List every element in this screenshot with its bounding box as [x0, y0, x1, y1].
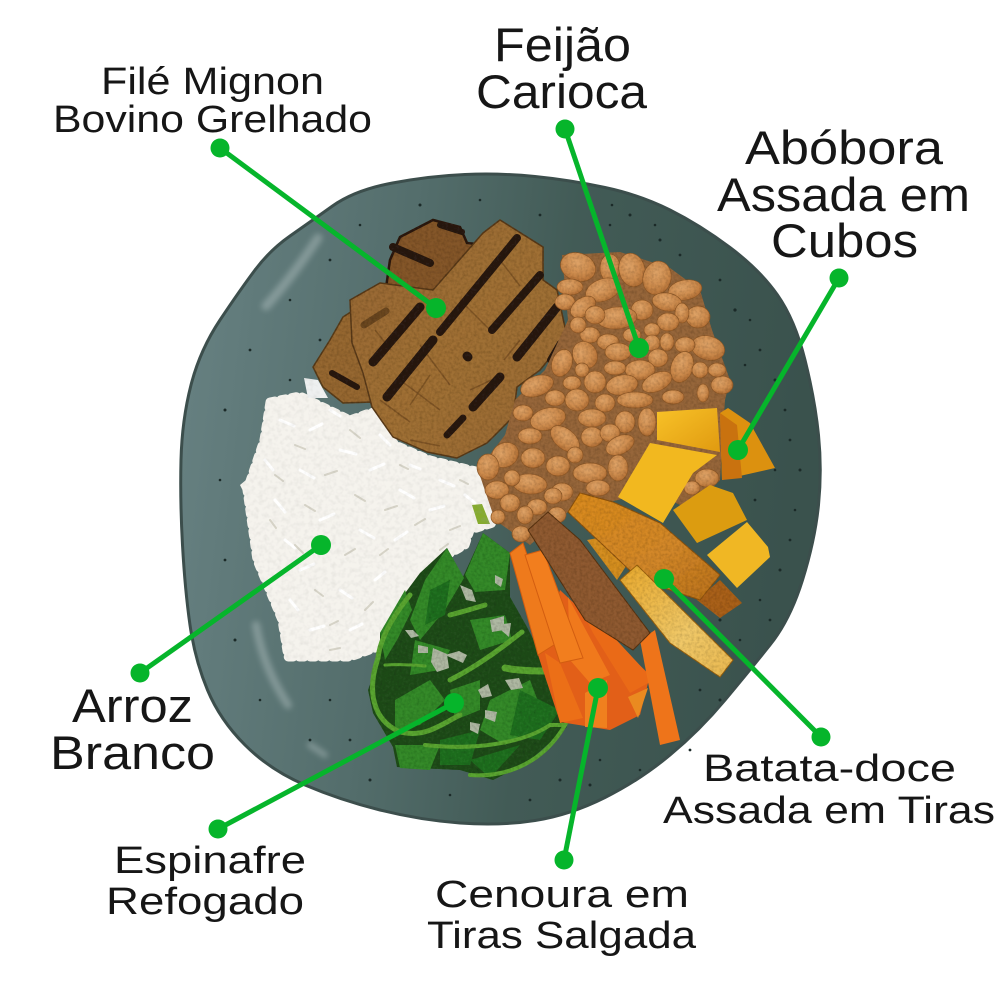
label: Espinafre Refogado: Refogado [106, 881, 304, 923]
label: Espinafre Refogado: Espinafre [114, 840, 306, 882]
label: Filé Mignon Bovino Grelhado: Filé Mignon [101, 61, 324, 103]
strip pale [620, 565, 733, 677]
label: Arroz Branco: Branco [50, 726, 215, 779]
strip brown [528, 512, 650, 650]
label: Abóbora Assada em Cubos: Cubos [771, 214, 918, 267]
label: Espinafre Refogado [106, 840, 306, 923]
plate speckles [219, 199, 801, 801]
leader: Feijão [556, 120, 649, 358]
label: Abóbora Assada em Cubos [717, 121, 970, 267]
label: Filé Mignon Bovino Grelhado: Bovino Grelhado [53, 99, 372, 141]
label: Abóbora Assada em Cubos: Abóbora [745, 121, 944, 174]
food: pumpkin cubes [618, 408, 775, 588]
plate glare [256, 238, 325, 755]
leader: Arroz [130, 535, 331, 682]
label: Batata-doce Assada em Tiras [663, 748, 995, 832]
label: Batata-doce Assada em Tiras: Assada em Tiras [663, 790, 995, 832]
steak main [350, 220, 567, 458]
label: Arroz Branco [50, 679, 215, 779]
food: sweet potato [528, 493, 742, 677]
label: Feijão Carioca: Feijão [494, 18, 631, 71]
food: beans [477, 248, 733, 545]
food: grilled steak [313, 220, 567, 458]
label: Feijão Carioca [476, 18, 648, 118]
plate [181, 174, 820, 824]
label: Cenoura em Tiras Salgada [427, 874, 697, 957]
food: spinach [368, 533, 567, 780]
green leek bit [472, 504, 490, 524]
label: Abóbora Assada em Cubos: Assada em [717, 168, 970, 221]
leader: Filé Mignon [210, 138, 446, 318]
strip golden [568, 493, 720, 600]
strip dark end [697, 580, 742, 618]
label: Cenoura em Tiras Salgada: Cenoura em [435, 874, 689, 916]
steak back [385, 220, 485, 300]
label: Cenoura em Tiras Salgada: Tiras Salgada [427, 915, 697, 957]
leader: Espinafre [208, 693, 464, 838]
leader: Cenoura [554, 678, 608, 870]
label: Arroz Branco: Arroz [72, 679, 193, 732]
rice grain texture [265, 410, 475, 650]
strip small [587, 537, 630, 580]
leader: Batata-doce [654, 569, 830, 746]
label: Batata-doce Assada em Tiras: Batata-doce [703, 748, 956, 790]
steak left [313, 290, 385, 403]
leaves [380, 533, 545, 770]
steak texture [375, 260, 520, 446]
sauteed garlic bits [405, 575, 523, 734]
label: Filé Mignon Bovino Grelhado [53, 61, 372, 141]
food: carrots [510, 543, 680, 745]
food: rice [240, 378, 497, 657]
stems [373, 595, 565, 775]
leader: Abóbora [728, 268, 848, 460]
label: Feijão Carioca: Carioca [476, 65, 648, 118]
grill marks [332, 225, 560, 435]
